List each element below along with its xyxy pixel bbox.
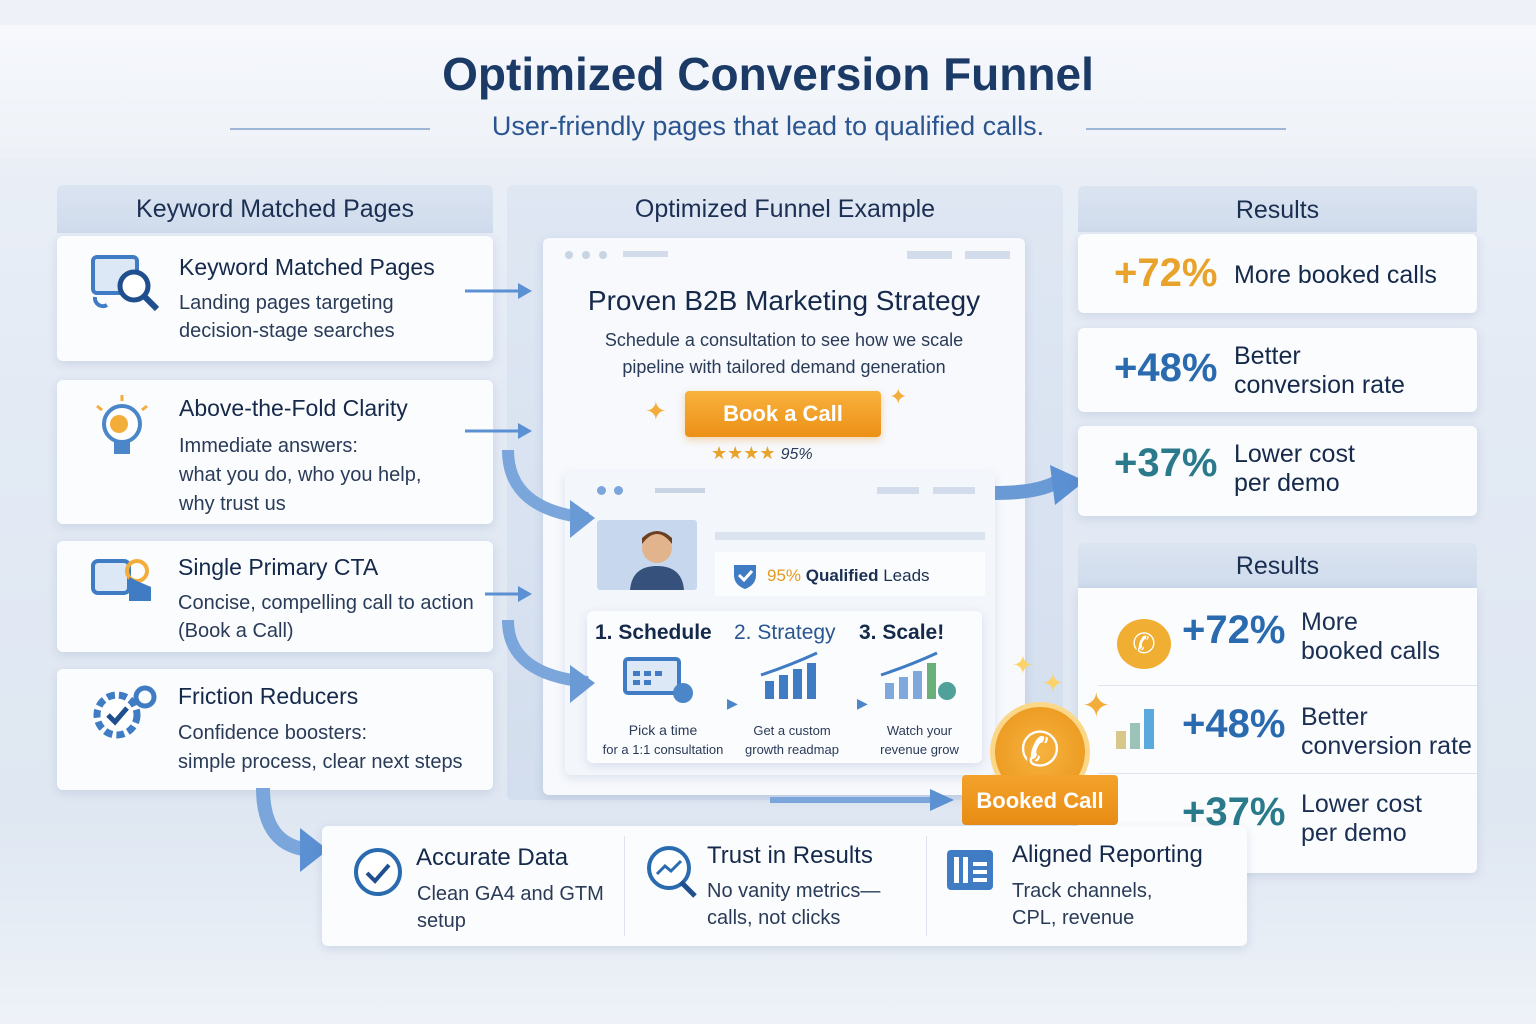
- badge: qualified leads: [715, 552, 985, 596]
- booked call badge: ✦: [1082, 687, 1110, 725]
- stat: 72%: [1078, 234, 1477, 313]
- stat: 37%: [1078, 426, 1477, 516]
- card: keyword matched pages: decision-stage searches: [179, 320, 395, 342]
- booked call badge: ✦: [1012, 650, 1034, 680]
- panel: left keyword matched pages: [54, 185, 496, 796]
- steps: growth readmap: [745, 742, 839, 757]
- steps: 1. Schedule: [595, 621, 712, 644]
- card: keyword matched pages: Keyword Matched Pages: [179, 254, 435, 280]
- item: aligned reporting: [947, 841, 1203, 929]
- inner browser: [565, 472, 995, 775]
- photo: consultant: [597, 520, 697, 590]
- item: accurate data: Accurate Data: [416, 844, 568, 871]
- booked call badge: Booked Call: [976, 788, 1104, 813]
- arrow: middle to results: [995, 465, 1078, 505]
- title: Optimized Conversion Funnel: [442, 48, 1094, 100]
- browser mockup: ✦: [889, 384, 907, 409]
- stat: 72%: More booked calls: [1234, 261, 1437, 289]
- headline: Proven B2B Marketing Strategy: [588, 285, 980, 316]
- steps: for a 1:1 consultation: [603, 742, 723, 757]
- panel: results bottom: Lower cost: [1301, 790, 1422, 818]
- item: trust in results: Trust in Results: [707, 842, 873, 869]
- card: above the fold: Above-the-Fold Clarity: [179, 395, 408, 421]
- icon: search page: [91, 255, 160, 312]
- rating: ★★★★ 95%: [711, 443, 813, 463]
- steps: Get a custom: [753, 723, 831, 738]
- steps: revenue grow: [880, 742, 959, 757]
- icon: growth chart: [760, 652, 818, 699]
- icon: gear check: [94, 686, 156, 738]
- icon: calendar: [623, 657, 693, 703]
- card: above the fold: [57, 380, 493, 524]
- card: keyword matched pages: [57, 236, 493, 361]
- arrow: to booked call: [770, 789, 954, 811]
- header band: [0, 25, 1536, 158]
- item: accurate data: setup: [417, 910, 466, 932]
- card: keyword matched pages: Landing pages targeting: [179, 292, 394, 314]
- browser mockup: [543, 238, 1025, 795]
- subtitle: User-friendly pages that lead to qualified calls.: [492, 111, 1044, 141]
- steps: ▶: [727, 695, 738, 711]
- card: friction reducers: [57, 669, 493, 790]
- badge: qualified leads: 95% Qualified Leads: [767, 566, 930, 585]
- stat row 37: +37%: [1182, 790, 1285, 834]
- panel: results top: [1076, 186, 1480, 522]
- item: accurate data: Clean GA4 and GTM: [417, 883, 604, 905]
- stat: 37%: per demo: [1234, 469, 1340, 497]
- booked call badge: ✆: [1020, 724, 1060, 777]
- card: single CTA: Concise, compelling call to action: [178, 592, 474, 614]
- left header: [57, 185, 493, 233]
- item: aligned reporting: Aligned Reporting: [1012, 841, 1203, 868]
- stat: 37%: Lower cost: [1234, 440, 1355, 468]
- item: aligned reporting: Track channels,: [1012, 880, 1152, 902]
- arrows: left to middle: [465, 283, 595, 703]
- panel: results bottom: booked calls: [1301, 637, 1440, 665]
- booked call badge: [962, 650, 1118, 825]
- left header: Keyword Matched Pages: [136, 195, 414, 223]
- arrow: left to bottom: [256, 788, 322, 872]
- card: above the fold: what you do, who you help,: [179, 464, 421, 486]
- item: trust in results: [647, 842, 880, 929]
- steps: 3. Scale!: [859, 621, 944, 644]
- button: book a call: Book a Call: [723, 401, 843, 426]
- panel: results bottom: Better: [1301, 703, 1368, 731]
- stat: 48%: Better: [1234, 342, 1301, 370]
- stat row 48: +48%: [1182, 702, 1285, 746]
- steps: Watch your: [887, 723, 952, 738]
- stat: 48%: conversion rate: [1234, 371, 1405, 399]
- description: [605, 330, 963, 377]
- item: trust in results: No vanity metrics—: [707, 880, 880, 902]
- icon: phone: [1117, 619, 1171, 669]
- browser mockup: ✦: [645, 396, 667, 426]
- stat: 37%: +37%: [1114, 441, 1217, 485]
- card: single CTA: [57, 541, 493, 652]
- card: friction reducers: Friction Reducers: [178, 683, 358, 709]
- panel: results bottom: conversion rate: [1301, 732, 1472, 760]
- stat: 48%: +48%: [1114, 346, 1217, 390]
- card: single CTA: (Book a Call): [178, 620, 294, 642]
- steps: 2. Strategy: [734, 621, 836, 644]
- panel: results bottom: More: [1301, 608, 1358, 636]
- button: book a call: [685, 391, 881, 437]
- card: friction reducers: simple process, clear next steps: [178, 751, 463, 773]
- steps: ▶: [857, 695, 868, 711]
- panel: results bottom: per demo: [1301, 819, 1407, 847]
- steps: Pick a time: [629, 722, 697, 738]
- icon: cta click: [91, 559, 151, 601]
- bottom bar: [322, 826, 1247, 946]
- steps: [587, 611, 982, 763]
- description: Schedule a consultation to see how we scale: [605, 330, 963, 350]
- panel: results bottom: [1076, 548, 1480, 878]
- item: trust in results: calls, not clicks: [707, 907, 840, 929]
- card: above the fold: why trust us: [179, 493, 286, 515]
- booked call badge: ✦: [1042, 668, 1064, 698]
- item: aligned reporting: CPL, revenue: [1012, 907, 1134, 929]
- description: pipeline with tailored demand generation: [622, 357, 946, 377]
- icon: revenue chart: [880, 652, 956, 700]
- card: friction reducers: Confidence boosters:: [178, 722, 367, 744]
- card: above the fold: Immediate answers:: [179, 435, 358, 457]
- middle header: Optimized Funnel Example: [635, 195, 935, 223]
- stat: 48%: [1078, 328, 1477, 412]
- icon: bars: [1116, 709, 1154, 749]
- panel: optimized funnel example: [507, 185, 1063, 800]
- card: single CTA: Single Primary CTA: [178, 554, 378, 580]
- item: accurate data: [354, 844, 604, 932]
- icon: lightbulb: [96, 395, 148, 454]
- stat: 72%: +72%: [1114, 251, 1217, 295]
- panel: results top: Results: [1236, 196, 1319, 224]
- stat row 72: +72%: [1182, 608, 1285, 652]
- icon: phone: ✆: [1132, 628, 1156, 659]
- panel: results bottom: Results: [1236, 552, 1319, 580]
